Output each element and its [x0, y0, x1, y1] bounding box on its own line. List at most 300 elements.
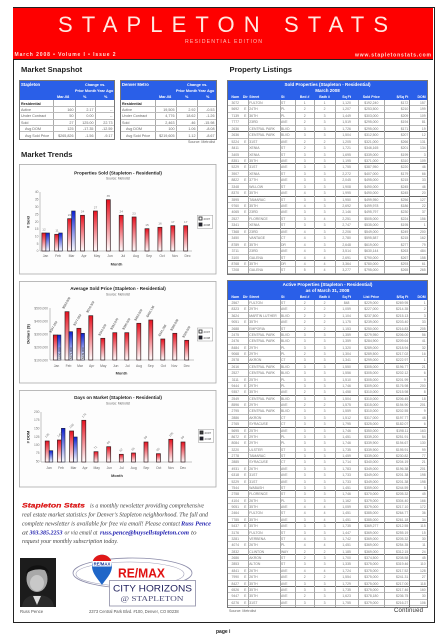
chart: average sold price: $371,000	[69, 347, 73, 359]
table: sold properties: 127	[420, 198, 426, 202]
table: sold properties: 1,519	[342, 120, 351, 124]
table: active properties: 3	[324, 352, 326, 356]
table: active properties: 2476	[232, 339, 239, 343]
table: active properties: ALTON	[249, 562, 260, 566]
chart: average sold price: Nov	[171, 364, 178, 368]
table: active properties: ST	[281, 511, 285, 515]
table: Stapleton snapshot: Year Ago	[97, 88, 113, 92]
table: active properties: $204.19	[396, 460, 408, 464]
table: sold properties: 3	[304, 198, 306, 202]
table: active properties: 45	[422, 492, 426, 496]
table: active properties: $315,000	[364, 403, 378, 407]
table: active properties: 16	[422, 352, 426, 356]
table: active properties: 106	[420, 601, 426, 605]
chart: properties sold: 24	[119, 210, 123, 214]
table: active properties: CENTRAL PARK	[249, 365, 275, 369]
table: active properties: $198.11	[396, 428, 408, 432]
table: active properties: 3	[304, 582, 306, 586]
text block: newsletter description: Stapleton Stats	[22, 502, 85, 510]
chart: days on market: 100	[34, 443, 40, 447]
chart: average sold price: $563,908	[61, 296, 71, 310]
table: sold properties: $220	[401, 165, 408, 169]
table: sold properties: 8411	[232, 146, 239, 150]
table: sold properties: 22	[422, 204, 426, 208]
table: active properties: Num	[231, 295, 239, 299]
table: Stapleton snapshot: Stapleton	[21, 82, 40, 87]
table: active properties: ST	[281, 530, 285, 534]
table: sold properties: $407,000	[364, 172, 378, 176]
text block: newsletter description: real estate market statistics for Denver's Stapleton neighborhood. The full and	[22, 512, 209, 518]
table: active properties: 198	[420, 473, 426, 477]
table: active properties: MARTIN LUTHER	[249, 314, 277, 318]
table: active properties: PL	[281, 499, 285, 503]
table: active properties: 198	[420, 480, 426, 484]
table: sold properties: $310	[401, 159, 408, 163]
table: active properties: $201.99	[396, 378, 408, 382]
table: active properties: 26TH	[249, 569, 258, 573]
chart: average sold price: $200,000	[34, 346, 48, 350]
source note: Source: Metrolist	[188, 140, 215, 144]
table: active properties: $229,000	[364, 301, 378, 305]
chart: average sold price: $395,000	[121, 317, 131, 330]
table: sold properties: $201	[401, 146, 408, 150]
table: active properties: 4	[324, 543, 326, 547]
table: sold properties: 7208	[232, 268, 239, 272]
chart: days on market: Nov	[168, 466, 174, 470]
table: active properties: 1,162	[342, 499, 351, 503]
table: sold properties: TAMARAC	[249, 198, 266, 202]
table: sold properties: 1,449	[342, 114, 351, 118]
table: sold properties: 7139	[232, 114, 239, 118]
table: Denver Metro snapshot: -15.98	[204, 121, 214, 125]
table: active properties: 3	[324, 601, 326, 605]
table: active properties: 29TH	[249, 435, 258, 439]
table: active properties: Bed #	[300, 295, 309, 299]
table: active properties: AVE	[281, 480, 288, 484]
table: active properties: E	[244, 378, 246, 382]
table: active properties: $375,000	[364, 569, 378, 573]
table: sold properties: AVE	[281, 230, 288, 234]
table: active properties: List Price	[363, 295, 379, 299]
table: active properties: 2	[324, 326, 326, 330]
table: active properties: 35TH	[249, 320, 258, 324]
table: sold properties: 3	[304, 159, 306, 163]
table: active properties: E	[244, 524, 246, 528]
table: active properties: 1,742	[342, 537, 351, 541]
table: sold properties: XENIA	[249, 146, 259, 150]
table: active properties: E	[244, 307, 246, 311]
table: active properties: $350,000	[364, 428, 378, 432]
table: active properties: 1,451	[342, 518, 351, 522]
table: active properties: 41	[422, 339, 426, 343]
chart: average sold price: Jan	[54, 364, 59, 368]
table: active properties: 2464	[232, 511, 239, 515]
table: active properties: 31ST	[249, 480, 257, 484]
table: active properties: $305,000	[364, 365, 378, 369]
table: active properties: AKRON	[249, 416, 261, 420]
table: active properties: 1,746	[342, 441, 351, 445]
text block: newsletter description: request your monthly subscription today.	[22, 538, 118, 545]
chart: properties sold: 35	[107, 194, 110, 198]
chart: properties sold: Properties Sold (Stapleton - Residential)	[74, 170, 162, 176]
table: active properties: 2758	[232, 492, 239, 496]
table: active properties: $237,500	[364, 314, 378, 318]
table: active properties: $339,900	[364, 448, 378, 452]
table: sold properties: $267	[401, 256, 408, 260]
table: active properties: 3220	[232, 448, 239, 452]
table: active properties: 201	[420, 467, 426, 471]
table: sold properties: 8370	[232, 191, 239, 195]
table: sold properties: 46	[422, 185, 426, 189]
table: active properties: AVE	[281, 524, 288, 528]
table: sold properties: ST	[281, 223, 285, 227]
table: sold properties: $195	[401, 223, 408, 227]
table: sold properties: 4	[324, 268, 326, 272]
table: active properties: AVE	[281, 518, 288, 522]
table: active properties: CENTRAL PARK	[249, 333, 275, 337]
table: active properties: $202.55	[396, 409, 408, 413]
table: sold properties: $194	[401, 120, 408, 124]
chart: days on market: 62	[118, 447, 124, 453]
table: Stapleton snapshot: 125.00	[82, 121, 94, 125]
table: active properties: 3	[304, 333, 306, 337]
text block: newsletter description: 303.385.2253	[29, 530, 62, 536]
table: active properties: 1,359	[342, 339, 351, 343]
table: sold properties: Bath #	[319, 95, 330, 99]
chart: properties sold: Feb	[55, 254, 61, 258]
chart: properties sold: 2008	[204, 223, 211, 227]
table: active properties: 3	[304, 339, 306, 343]
table: sold properties: 2,045	[342, 178, 351, 182]
table: active properties: 1,175	[342, 320, 351, 324]
chart: days on market: Jul	[120, 466, 124, 470]
table: sold properties: 3	[324, 172, 326, 176]
chart: average sold price: $350,050	[58, 347, 62, 359]
table: active properties: 6276	[232, 601, 239, 605]
table: sold properties: 3	[424, 152, 426, 156]
table: sold properties: $790,000	[364, 256, 378, 260]
table: active properties: 2	[324, 314, 326, 318]
chart: properties sold: Apr	[81, 254, 88, 258]
table: active properties: 2	[304, 594, 306, 598]
title: www.stapletonstats.com	[354, 52, 432, 58]
table: active properties: 1,451	[342, 486, 351, 490]
table: active properties: $176.98	[396, 384, 408, 388]
table: active properties: $194.90	[396, 403, 408, 407]
table: active properties: E	[244, 467, 246, 471]
table: active properties: 3	[324, 409, 326, 413]
text block: newsletter description: at	[22, 530, 28, 536]
table: sold properties: BLVD	[281, 133, 290, 137]
logo: RE/MAX City Horizons: @ STAPLETON	[120, 594, 184, 603]
chart: average sold price: Dec	[184, 364, 190, 368]
table: active properties: $369,000	[364, 530, 378, 534]
heading: market trends: Market Trends	[21, 150, 72, 159]
table: Stapleton snapshot: $265,826	[58, 134, 74, 138]
table: sold properties: 3	[324, 191, 326, 195]
chart: days on market: 86	[106, 440, 111, 445]
table: sold properties: $312,500	[364, 133, 378, 137]
table: sold properties: $549,000	[364, 230, 378, 234]
table: active properties: 3	[324, 435, 326, 439]
table: sold properties: $245	[401, 191, 408, 195]
table: active properties: $375,000	[364, 575, 378, 579]
table: sold properties: AVE	[281, 204, 288, 208]
table: active properties: 5	[424, 486, 426, 490]
table: sold properties: $295,000	[364, 127, 378, 131]
table: active properties: $349,000	[364, 467, 378, 471]
chart: average sold price: May	[100, 364, 107, 368]
table: active properties: 31ST	[249, 473, 257, 477]
continued note: Continued	[394, 608, 423, 614]
chart: average sold price: Mar	[77, 364, 84, 368]
title: RESIDENTIAL EDITION	[185, 39, 262, 45]
table: sold properties: 3348	[232, 185, 239, 189]
table: sold properties: 2,747	[342, 223, 351, 227]
table: active properties: 3	[324, 486, 326, 490]
table: active properties: 160	[420, 588, 426, 592]
table: active properties: FLORENCE	[249, 492, 268, 496]
table: active properties: E	[244, 594, 246, 598]
table: active properties: 3	[304, 518, 306, 522]
chart: average sold price: Apr	[89, 364, 95, 368]
table: active properties: $310,000	[364, 390, 378, 394]
table: active properties: CENTRAL PARK	[249, 371, 275, 375]
table: active properties: $254.35	[396, 543, 408, 547]
table: sold properties: 2	[324, 107, 326, 111]
table: sold properties: 2,780	[342, 236, 351, 240]
table: sold properties: $186	[401, 204, 408, 208]
chart: properties sold: 35	[35, 198, 39, 202]
table: Denver Metro snapshot: 100	[168, 127, 174, 131]
heading: property listings: Property Listings	[230, 65, 292, 74]
table: active properties: 54	[422, 435, 426, 439]
table: sold properties: E	[244, 204, 246, 208]
table: sold properties: 3595	[232, 198, 239, 202]
table: sold properties: 3	[324, 133, 326, 137]
table: active properties: 77	[422, 454, 426, 458]
table: sold properties: XENIA	[249, 172, 259, 176]
table: active properties: BLVD	[281, 333, 290, 337]
table: active properties: 2	[304, 550, 306, 554]
table: sold properties: 4	[304, 204, 306, 208]
table: sold properties: $490,000	[364, 185, 378, 189]
table: active properties: 2	[304, 575, 306, 579]
table: sold properties: 35TH	[249, 243, 258, 247]
table: sold properties: 61	[422, 262, 426, 266]
table: active properties: 3	[304, 441, 306, 445]
chart: average sold price: $492,136	[145, 305, 155, 318]
table: active properties: $241.31	[396, 575, 408, 579]
table: sold properties: 109	[420, 114, 426, 118]
table: active properties: $217.10	[396, 505, 408, 509]
table: sold properties: $263	[401, 249, 408, 253]
chart: average sold price: $347,250	[48, 320, 58, 334]
table: active properties: 3	[304, 371, 306, 375]
table: active properties: AVE	[281, 588, 288, 592]
table: sold properties: $495,000	[364, 178, 378, 182]
table: sold properties: Street	[249, 95, 259, 99]
masthead banner	[13, 8, 433, 60]
table: active properties: $216.83	[396, 326, 408, 330]
table: active properties: 9444	[232, 384, 239, 388]
table: active properties: BLVD	[281, 409, 290, 413]
table: active properties: 2765	[232, 422, 239, 426]
table: sold properties: 1,120	[342, 101, 351, 105]
chart: properties sold: Month	[111, 262, 123, 266]
table: active properties: 26TH	[249, 467, 258, 471]
chart: properties sold: 40	[35, 190, 39, 194]
table: sold properties: 3	[324, 249, 326, 253]
chart: properties sold: 16	[158, 222, 162, 226]
table: sold properties: 3	[304, 133, 306, 137]
table: active properties: WABASH	[249, 486, 264, 490]
table: sold properties: 3	[324, 210, 326, 214]
table: Stapleton snapshot: %	[83, 95, 86, 99]
table: sold properties: 131	[420, 140, 426, 144]
table: active properties: 1,320	[342, 346, 351, 350]
table: active properties: $196.38	[396, 467, 408, 471]
table: sold properties: 20	[422, 191, 426, 195]
table: active properties: $385,000	[364, 518, 378, 522]
table: sold properties: 31ST	[249, 140, 257, 144]
chart: days on market: # DOM	[26, 430, 30, 443]
table: active properties: 1,504	[342, 397, 351, 401]
table: Denver Metro snapshot: Denver Metro	[122, 82, 149, 87]
table: active properties: 1,458	[342, 390, 351, 394]
table: sold properties: 23RD	[249, 210, 258, 214]
table: sold properties: $215	[401, 236, 408, 240]
table: active properties: $359,000	[364, 486, 378, 490]
table: Stapleton snapshot: %	[104, 95, 107, 99]
table: sold properties: 35TH	[249, 191, 258, 195]
table: active properties: $339,000	[364, 454, 378, 458]
table: active properties: 2	[304, 314, 306, 318]
table: sold properties: 23RD	[249, 230, 258, 234]
table: active properties: 2	[304, 301, 306, 305]
table: active properties: 1	[424, 301, 426, 305]
table: active properties: $217.46	[396, 588, 408, 592]
table: sold properties: 2,691	[342, 256, 351, 260]
table: sold properties: CENTRAL PARK	[249, 133, 275, 137]
table: sold properties: 2527	[232, 217, 239, 221]
table: Denver Metro snapshot: 18.62	[186, 114, 196, 118]
table: active properties: $375,000	[364, 582, 378, 586]
table: active properties: 1,623	[342, 594, 351, 598]
table: sold properties: DR	[281, 243, 286, 247]
table: sold properties: ST	[281, 256, 285, 260]
table: sold properties: 3907	[232, 172, 239, 176]
table: sold properties: 4	[324, 217, 326, 221]
table: sold properties: $199	[401, 152, 408, 156]
table: active properties: AKRON	[249, 358, 261, 362]
table: active properties: AVE	[281, 505, 288, 509]
table: sold properties: $224	[401, 217, 408, 221]
table: sold properties: PL	[281, 107, 285, 111]
table: Stapleton snapshot: 2.17	[86, 108, 94, 112]
table: active properties: $212.55	[396, 524, 408, 528]
table: active properties: 3176	[232, 530, 239, 534]
table: active properties: 3	[304, 601, 306, 605]
table: active properties: 1,559	[342, 409, 351, 413]
table: active properties: 35TH	[249, 588, 258, 592]
table: Stapleton snapshot: -12.59	[102, 127, 112, 131]
table: active properties: 8484	[232, 346, 239, 350]
table: Stapleton snapshot: Under Contract	[21, 114, 46, 118]
chart: days on market: 150	[34, 426, 40, 430]
table: active properties: 2	[324, 550, 326, 554]
table: active properties: $201.38	[396, 480, 408, 484]
chart: properties sold: Nov	[172, 254, 178, 258]
table: active properties: 3	[324, 594, 326, 598]
chart: properties sold: 17	[171, 220, 175, 224]
table: active properties: 3	[304, 448, 306, 452]
table: sold properties: 3405	[232, 152, 239, 156]
table: active properties: 29TH	[249, 352, 258, 356]
table: sold properties: 3	[324, 114, 326, 118]
table: sold properties: 9760	[232, 204, 239, 208]
table: active properties: 2	[304, 320, 306, 324]
table: active properties: ULSTER	[249, 448, 263, 452]
table: sold properties: 35TH	[249, 204, 258, 208]
table: active properties: $340,000	[364, 460, 378, 464]
table: active properties: 3	[324, 454, 326, 458]
table: active properties: $304.40	[396, 499, 408, 503]
chart: days on market: 50	[36, 460, 40, 464]
table: active properties: $264.77	[396, 511, 408, 515]
table: active properties: $374,500	[364, 556, 378, 560]
table: active properties: 3	[304, 358, 306, 362]
table: active properties: 9068	[232, 352, 239, 356]
chart: days on market: 99	[143, 435, 148, 440]
chart: days on market: May	[93, 466, 100, 470]
chart: average sold price: $463,000	[133, 308, 143, 322]
icon: balloon: RE/MAX	[94, 562, 110, 567]
table: sold properties: $277	[401, 243, 408, 247]
table: sold properties: 7777	[232, 120, 239, 124]
table: active properties: 1,451	[342, 435, 351, 439]
table: active properties: 3	[324, 562, 326, 566]
table: sold properties: 3	[324, 127, 326, 131]
table: sold properties: CT	[281, 236, 286, 240]
source note: listings: Source: Metrolist	[229, 609, 256, 613]
table: sold properties: 3	[304, 217, 306, 221]
table: active properties: FULTON	[249, 301, 263, 305]
caption: Russ Pence: Russ Pence	[20, 609, 43, 614]
table: active properties: 3624	[232, 314, 239, 318]
table: active properties: AVE	[281, 575, 288, 579]
table: sold properties: 24TH	[249, 107, 258, 111]
table: active properties: CT	[281, 416, 286, 420]
table: active properties: 1,746	[342, 384, 351, 388]
chart: average sold price: $339,000	[81, 347, 85, 359]
table: sold properties: 1,504	[342, 133, 351, 137]
table: active properties: 3	[324, 428, 326, 432]
chart: days on market: 200	[34, 410, 40, 414]
table: sold properties: 3	[324, 198, 326, 202]
table: sold properties: 23RD	[249, 120, 258, 124]
title: March 2008 • Volume I • Issue 2	[14, 52, 116, 58]
table: active properties: 4	[324, 518, 326, 522]
table: active properties: SYRACUSE	[249, 460, 268, 464]
table: sold properties: 484	[420, 249, 426, 253]
table: active properties: $305,000	[364, 371, 378, 375]
table: active properties: 6	[424, 422, 426, 426]
table: active properties: 4104	[232, 499, 239, 503]
table: active properties: E	[244, 499, 246, 503]
table: active properties: $385,000	[364, 511, 378, 515]
table: active properties: 1,451	[342, 543, 351, 547]
